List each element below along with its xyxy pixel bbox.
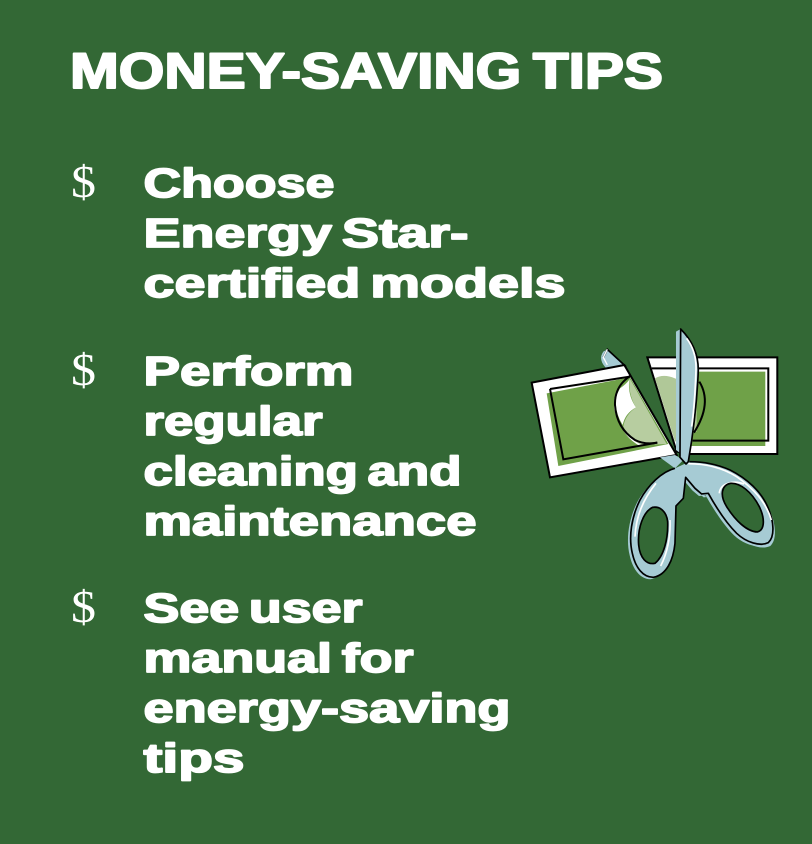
title: MONEY-SAVING TIPS <box>70 43 663 99</box>
handle shadow <box>628 464 770 579</box>
back blade tip <box>601 349 627 369</box>
tip 3 <box>71 581 510 781</box>
scissor front blade <box>676 329 698 464</box>
tip 2 text: regular <box>144 398 323 444</box>
tip 2 text: Perform <box>144 348 354 394</box>
dollar bullet 3: $ <box>71 581 96 632</box>
dollar bullet 2: $ <box>71 344 96 395</box>
tip 3 text: See user <box>144 585 363 631</box>
tip 3 text <box>144 585 510 781</box>
right half of banknote <box>647 357 777 454</box>
tip 1 <box>71 156 566 306</box>
tip 1 text: Energy Star- <box>144 210 468 256</box>
tip 2 text: cleaning and <box>144 448 462 494</box>
scissor handles <box>628 462 775 579</box>
tip 1 text: certified models <box>144 260 566 306</box>
tip 3 text: energy-saving <box>144 685 510 731</box>
handle highlights <box>635 464 771 537</box>
tip 2 text: maintenance <box>144 498 476 544</box>
tip 1 text: Choose <box>144 160 334 206</box>
handle body <box>631 462 773 577</box>
tip 2 <box>71 344 476 544</box>
icon: scissors cutting a banknote <box>532 329 777 579</box>
tip 3 text: tips <box>144 735 244 781</box>
tip 1 text <box>144 160 566 306</box>
tip 2 text <box>144 348 476 544</box>
tip 3 text: manual for <box>144 635 414 681</box>
finger hole left <box>638 507 668 564</box>
left half of banknote <box>532 365 677 477</box>
dollar bullet 1: $ <box>71 156 96 207</box>
back blade shank <box>660 455 683 468</box>
finger hole right <box>722 483 763 532</box>
